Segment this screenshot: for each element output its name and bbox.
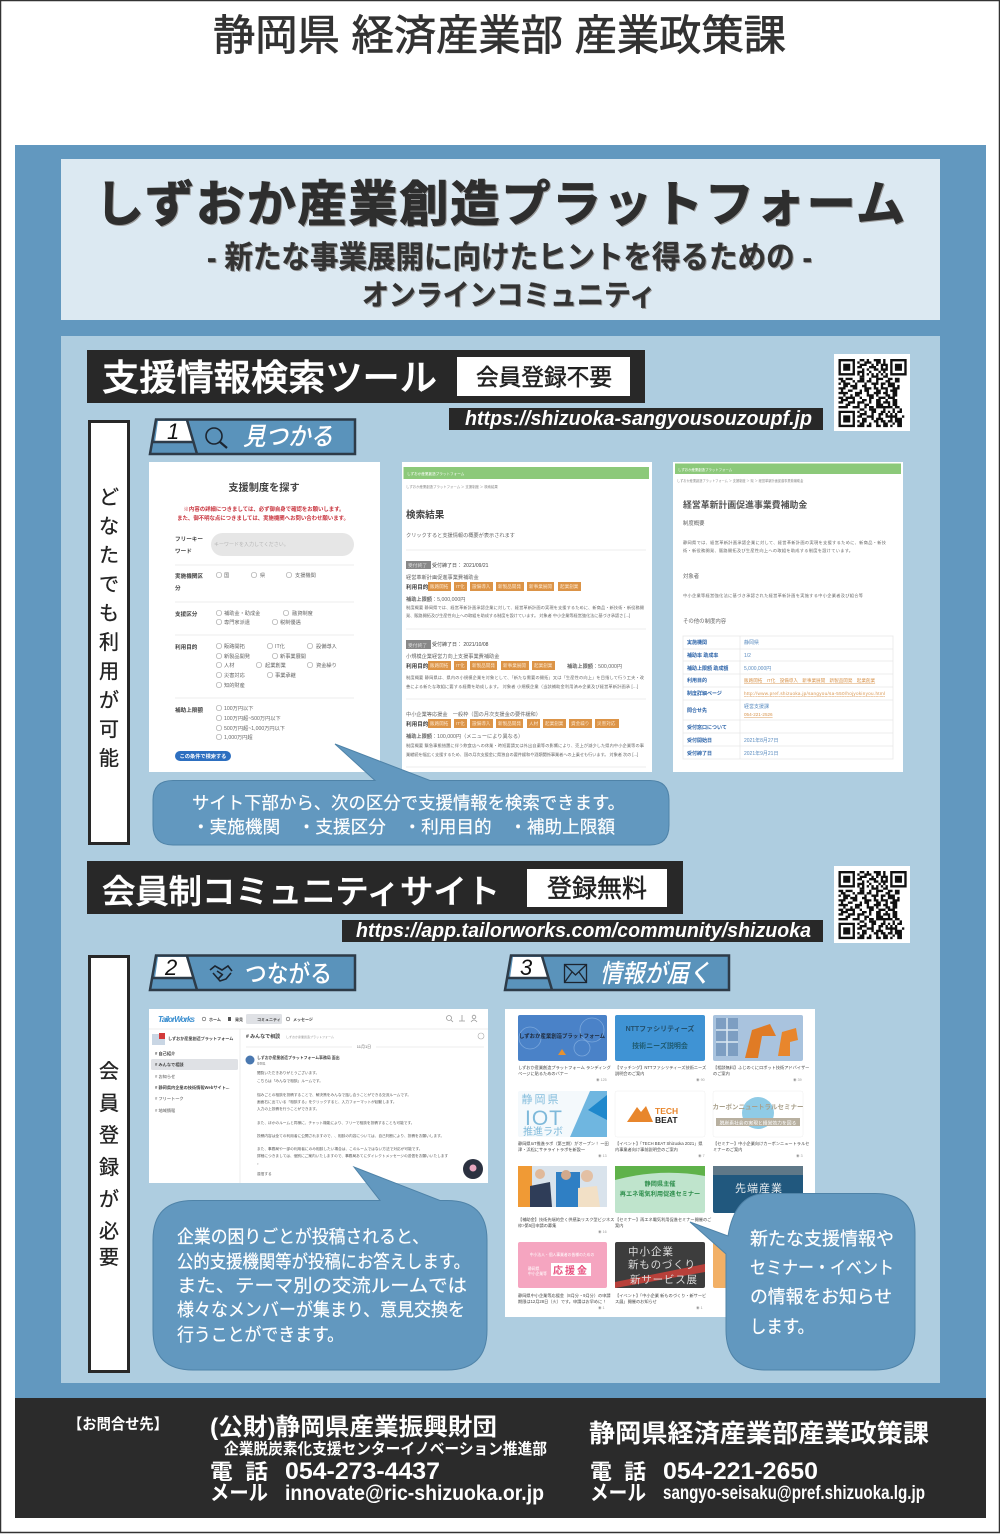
step tab 3: receive info: 3: [520, 955, 533, 980]
contact: foundation: 企業脱炭素化支援センターイノベーション推進部: [224, 1439, 547, 1458]
thumbnail: carbon neutral: [712, 1091, 804, 1137]
screenshot: search results: 受付締了日： 2021/09/21: [432, 562, 489, 569]
thumbnail: NTT: [615, 1015, 705, 1061]
screenshot: search results: しずおか産業創造プラットフォーム ＞ 支援制度 ＞ 検索結果: [406, 484, 498, 489]
screenshot: subsidy detail: http://www.pref.shizuoka.jp/sangyou/sa-550/hojyokinyou.html: [744, 691, 885, 696]
section header: community site: 会員制コミュニティサイト: [102, 873, 500, 910]
callout: community explanation: 公的支援機関等が投稿にお答えします。: [177, 1252, 470, 1272]
url: community site: https://app.tailorworks.com/community/shizuoka: [356, 920, 811, 942]
screenshot: search form: [149, 462, 380, 772]
thumbnail captions: 静岡県中小企業等応援金（8月分・9月分）の申請: [518, 1292, 611, 1299]
thumbnail: new manufacturing expo: 新ものづくり: [628, 1259, 695, 1271]
screenshot: community chat: しずおか産業創造プラットフォーム事務局 面出: [257, 1055, 340, 1060]
search button: [175, 751, 231, 761]
screenshot: search results: 中小企業等応援金 一般枠（国の月次支援金の要件緩和）: [406, 710, 541, 718]
screenshot: search results: 販路開拓: [430, 662, 449, 669]
thumbnail captions: 枠>第5回申請の募集: [518, 1222, 557, 1229]
screenshot: search results: 設備導入: [472, 720, 491, 727]
thumbnail captions: しずおか産業創造プラットフォーム ランディング: [518, 1064, 611, 1071]
thumbnail captions: 【マッチング】NTTファシリティーズ技術ニーズ: [615, 1064, 706, 1071]
screenshot: search results: 新事業展開: [503, 662, 526, 669]
screenshot: search results: 経営革新計画促進事業費補助金: [406, 573, 479, 581]
step tab 1: find: 1: [167, 419, 179, 444]
subtitle line 2: オンラインコミュニティ: [362, 280, 656, 312]
screenshot: community chat: 11月1日: [357, 1044, 371, 1049]
screenshot: subsidy detail: 経営支援課: [744, 703, 769, 710]
thumbnail: carbon neutral: カーボンニュートラルセミナー: [712, 1102, 804, 1111]
screenshot: search form: 国: [224, 572, 229, 579]
screenshot: search form: 利用目的: [175, 643, 198, 651]
screenshot: search form: 新事業展開: [280, 652, 306, 660]
screenshot: search form: キーワードを入力してください。: [214, 541, 289, 548]
thumbnail captions: 津・浜松にサテライトラボを新設～: [518, 1146, 585, 1153]
screenshot: search form: 融資制度: [292, 609, 313, 617]
screenshot: search form: 設備導入: [316, 642, 338, 650]
screenshot: search form: また、御不明な点につきましては、実施機関へお問い合わせ願います。: [177, 514, 349, 522]
screenshot: community chat: 入力の上投稿を行うことができます。: [257, 1106, 319, 1111]
subtitle line 1: - 新たな事業展開に向けたヒントを得るための -: [207, 240, 812, 275]
screenshot: search results: 人材: [529, 720, 539, 726]
screenshot: community chat: 悩みごとの相談を投稿することで、解決策をみんなで話し合うことができる交流ルームです。: [257, 1092, 411, 1097]
screenshot: subsidy detail: 054-221-2526: [744, 712, 773, 717]
vertical label: anyone can use: 用: [99, 661, 119, 683]
vertical label: membership required: [90, 956, 128, 1372]
thumbnail captions: 内事業者向け事前説明会のご案内: [615, 1146, 678, 1153]
vertical label: membership required: 必: [99, 1220, 119, 1243]
vertical label: membership required: が: [99, 1188, 119, 1211]
callout: community explanation: 行うことができます。: [177, 1325, 344, 1345]
screenshot: community chat: # みんなで相談: [246, 1033, 280, 1040]
screenshot: search form: 100万円超~500万円以下: [224, 714, 281, 722]
screenshot: search form: 知的財産: [224, 681, 245, 689]
thumbnail: platform banner: [518, 1015, 607, 1061]
screenshot: subsidy detail: しずおか産業創造プラットフォーム ＞ 支援制度 ＞ 県 ＞ 経営革新計画促進事業費補助金: [677, 478, 804, 483]
screenshot: community chat: 閲覧いただきありがとうございます。: [257, 1070, 319, 1075]
screenshot: search results: 小規模企業経営力向上支援事業費補助金: [406, 652, 500, 660]
callout: search categories: サイト下部から、次の区分で支援情報を検索できます。: [192, 793, 625, 813]
screenshot: subsidy detail: 補助率 助成率: [687, 652, 718, 659]
screenshot: search results: 起業創業: [534, 662, 553, 669]
section header: search tool: 支援情報検索ツール: [102, 357, 437, 398]
panel: light blue content area: [61, 336, 940, 1383]
screenshot: subsidy detail: しずおか産業創造プラットフォーム: [678, 467, 733, 472]
screenshot: search form: 支援機関: [295, 571, 316, 579]
thumbnail: Tech Beat: BEAT: [655, 1115, 678, 1125]
screenshot: search results: 補助上限額：100,000円（メニューにより異なる）: [406, 732, 523, 740]
vertical label: anyone can use: 能: [99, 747, 119, 770]
contact: foundation: [210, 1414, 547, 1505]
screenshot: subsidy detail: [673, 462, 903, 772]
thumbnail: workers photo: [518, 1166, 607, 1213]
thumbnail captions: ◉ 7: [698, 1153, 705, 1158]
screenshot: search form: 資金繰り: [316, 661, 337, 669]
callout: news explanation: セミナー・イベント: [750, 1258, 894, 1278]
callout: community explanation: 企業の困りごとが投稿されると、: [177, 1227, 429, 1247]
screenshot: community chat: [149, 1009, 488, 1183]
screenshot: community chat: # 静岡県内企業の技術情報Webサイト...: [155, 1084, 229, 1091]
screenshot: subsidy detail: 経営革新計画促進事業費補助金: [683, 499, 807, 510]
screenshot: search results: 受付締了日： 2021/10/08: [432, 641, 489, 648]
screenshot: subsidy detail: 静岡県: [744, 639, 759, 646]
screenshot: community chat: # みんなで相談: [155, 1061, 184, 1068]
thumbnail: new manufacturing expo: 中小企業: [628, 1245, 674, 1258]
thumbnail captions: 【イベント】「中小企業 新ものづくり・新サービ: [615, 1292, 706, 1299]
screenshot: search form: 実施機関区: [175, 572, 203, 580]
icon: handshake: [210, 966, 232, 981]
thumbnail: new manufacturing expo: 新サービス展: [630, 1274, 698, 1286]
screenshot: search results: 発、販路開拓及び生産性向上への取組を助成する制度を設けています。 対象者 中小企業等経営強化法に基づき承認さ [...]: [406, 612, 630, 619]
screenshot: search form: 事業承継: [275, 671, 296, 679]
screenshot: subsidy detail: 受付締了日: [687, 750, 712, 757]
thumbnail: Tech Beat: TECH: [655, 1106, 678, 1116]
thumbnail: robots: [713, 1015, 803, 1061]
screenshot: search form: ワード: [175, 548, 192, 555]
thumbnail: advanced industry: [713, 1166, 803, 1213]
callout: community explanation: 様々なメンバーが集まり、意見交換を: [177, 1300, 465, 1320]
screenshot: search results: 販路開拓: [430, 720, 449, 727]
screenshot: search form: 100万円以下: [224, 705, 253, 712]
thumbnail captions: ◉ 3: [796, 1153, 803, 1158]
screenshot: subsidy detail: 問合せ先: [687, 707, 707, 714]
screenshot: search form: 分: [175, 584, 181, 592]
thumbnail captions: のご案内: [713, 1070, 730, 1077]
screenshot: search results: 利用目的: [406, 583, 429, 591]
step tab 1: find: [150, 419, 355, 454]
screenshot: community chat: 。: [257, 1161, 261, 1165]
thumbnail: carbon neutral: 脱炭素社会の実現と経営効力を図る: [720, 1120, 797, 1126]
contact label: 【お問合せ先】: [68, 1416, 168, 1433]
thumbnail: advanced industry: 先端産業: [735, 1181, 783, 1195]
thumbnail captions: ◉ 16: [598, 1229, 607, 1234]
contact: prefecture: sangyo-seisaku@pref.shizuoka.lg.jp: [663, 1483, 925, 1504]
callout: news explanation: [690, 1194, 915, 1370]
callout: community explanation: また、テーマ別の交流ルームでは: [177, 1276, 467, 1296]
thumbnail: support grant: 応援金: [553, 1264, 589, 1277]
screenshot: search form: ※内容の詳細につきましては、必ず御自身で確認をお願いします。: [184, 505, 344, 513]
thumbnail: renewable energy seminar: 再エネ電気利用促進セミナー: [620, 1190, 700, 1198]
thumbnail: event partly hidden: [713, 1242, 803, 1288]
vertical label: membership required: 員: [99, 1093, 119, 1115]
thumbnail: NTT: 技術ニーズ説明会: [632, 1041, 688, 1050]
screenshot: search form: この条件で検索する: [180, 752, 226, 760]
thumbnail captions: ページに貼るためのバナー: [518, 1070, 568, 1077]
vertical label: anyone can use: が: [99, 689, 119, 712]
screenshot: search results: 新事業展開: [529, 583, 552, 590]
screenshot: search results: 善による新たな取組に要する経費を助成します。 対象者 小規模企業（当該補助金利用済み企業及び経営革新計画承 [...]: [406, 683, 638, 690]
thumbnail: Tech Beat: [615, 1091, 705, 1137]
screenshot: search results: 検索結果: [406, 509, 445, 521]
thumbnail: renewable energy seminar: 静岡県主催: [645, 1180, 675, 1188]
screenshot: subsidy detail: その他の制度内容: [683, 617, 727, 625]
section header: search tool: [87, 350, 645, 403]
screenshot: community chat: 発見: [235, 1016, 243, 1022]
screenshot: community chat: また、事務局や一部の利用者にのみ相談したい場合は、このルームではない方法で対応が可能です。: [257, 1146, 422, 1151]
screenshot: search results: 資金繰り: [571, 720, 589, 727]
thumbnail captions: 説明会のご案内: [615, 1070, 644, 1077]
screenshot: community chat: # 自己紹介: [155, 1050, 176, 1057]
screenshot: search results: 設備導入: [472, 583, 491, 590]
screenshot: subsidy detail: 受付窓口について: [687, 724, 727, 731]
screenshot: community chat: 静岡県: [257, 1062, 266, 1066]
thumbnail captions: 【補助金】技術先端的会く供感染リスク型ビジネス: [518, 1216, 614, 1223]
screenshot: subsidy detail: 1/2: [744, 653, 751, 659]
icon: QR code 2: [834, 866, 910, 943]
screenshot: search results: 補助上限額：500,000円: [567, 662, 622, 670]
screenshot: community chat: # お知らせ: [155, 1073, 175, 1080]
thumbnail: IoT lab: IOT: [525, 1107, 563, 1130]
thumbnail: support grant: 静岡県: [528, 1266, 540, 1271]
screenshot: search results: 災害対応: [597, 720, 616, 727]
screenshot: subsidy detail: 受付開始日: [687, 737, 712, 744]
step tab 2: connect: つながる: [245, 961, 332, 988]
screenshot: news grid: [505, 1009, 815, 1317]
screenshot: subsidy detail: 術・新役務開発、販路開拓及び生産性向上への取組を助成する制度を設けています。: [683, 547, 853, 554]
screenshot: community chat: 詳細につきましては、個別にご案内いたしますので、事務局あてにダイレクトメッセージの送信をお願いいたします: [257, 1153, 449, 1158]
screenshot: search form: 販路開拓: [224, 642, 245, 650]
thumbnail captions: ◉ 1: [696, 1305, 703, 1310]
screenshot: subsidy detail: 2021年8月27日: [744, 737, 778, 744]
screenshot: search results: 新製品開発: [498, 720, 521, 727]
vertical label: anyone can use: 可: [99, 719, 119, 741]
screenshot: subsidy detail: 利用目的: [687, 677, 707, 684]
vertical label: membership required: 登: [99, 1124, 119, 1147]
thumbnail: support grant: 中小法人・個人事業者の皆様のための: [530, 1252, 594, 1257]
vertical label: anyone can use: [90, 422, 128, 844]
screenshot: search form: 支援制度を探す: [228, 481, 300, 494]
callout: news explanation: します。: [750, 1317, 814, 1337]
contact: prefecture: 静岡県経済産業部産業政策課: [589, 1420, 929, 1448]
section header: search tool: 会員登録不要: [476, 364, 612, 390]
thumbnail captions: ◉ 125: [596, 1077, 607, 1082]
screenshot: search results: クリックすると支援情報の概要が表示されます: [406, 531, 515, 539]
screenshot: search form: 新製品開発: [224, 652, 251, 660]
screenshot: subsidy detail: 制度詳細ページ: [687, 690, 722, 697]
thumbnail: platform banner: しずおか産業創造プラットフォーム: [519, 1032, 606, 1040]
thumbnail captions: 【イベント】「TECH BEAT Shizuoka 2021」県: [615, 1141, 703, 1147]
callout: news explanation: の情報をお知らせ: [750, 1287, 892, 1307]
screenshot: search results: 新製品開発: [498, 583, 521, 590]
screenshot: search results: IT化: [456, 720, 465, 727]
screenshot: search results: 補助上限額：5,000,000円: [406, 595, 465, 603]
contact: foundation: 054-273-4437: [285, 1458, 440, 1485]
screenshot: search results: 起業創業: [560, 583, 579, 590]
contact: foundation: innovate@ric-shizuoka.or.jp: [285, 1482, 544, 1505]
screenshot: community chat: しずおか産業創造プラットフォーム: [168, 1035, 233, 1041]
vertical label: anyone can use: ど: [99, 486, 119, 509]
screenshot: search form: 補助上限額: [175, 706, 203, 714]
section header: community site: 登録無料: [547, 875, 647, 903]
contact: foundation: (公財)静岡県産業振興財団: [210, 1414, 497, 1441]
step tab 2: connect: 2: [164, 955, 177, 980]
thumbnail captions: 静岡県IoT推進ラボ（第三期）がオープン！ ～田: [518, 1140, 609, 1147]
vertical label: anyone can use: た: [99, 545, 119, 567]
screenshot: search results: 制度概要 静岡県では、経営革新計画承認企業に対して、経営革新計画の実現を支援するために、新商品・新技術・新役務開: [406, 604, 644, 611]
screenshot: subsidy detail: 中小企業等経営強化法に基づき承認された経営革新計画を実施する中小企業者及び組合等: [683, 592, 863, 599]
thumbnail captions: ミナーのご案内: [713, 1146, 742, 1153]
callout: search categories: ・実施機関 ・支援区分 ・利用目的 ・補助上限額: [192, 817, 616, 837]
thumbnail: IoT lab: [518, 1091, 607, 1138]
screenshot: community chat: コミュニティ: [257, 1016, 281, 1022]
vertical label: membership required: 会: [99, 1060, 119, 1083]
panel: title banner: [61, 159, 940, 320]
vertical label: anyone can use: 利: [99, 631, 119, 654]
vertical label: anyone can use: で: [99, 574, 119, 596]
screenshot: search form: 県: [260, 572, 265, 579]
screenshot: search results: 業継続を幅広く支援するため、国の月次支援金に県独自の要件緩和や酒類関係事業者への上乗せも行います。 対象者 次の [...]: [406, 751, 638, 758]
thumbnail: support grant: [518, 1242, 607, 1288]
screenshot: search results: 利用目的: [406, 662, 429, 670]
contact: foundation: 電 話: [210, 1461, 268, 1484]
screenshot: community chat: # 地域情報: [155, 1107, 176, 1114]
thumbnail captions: 期限は12月28日（火）です。申請はお早めに！: [518, 1298, 606, 1305]
screenshot: community chat: 返信する: [257, 1171, 272, 1176]
screenshot: search results: しずおか産業創造プラットフォーム: [407, 471, 465, 476]
icon: QR code 1: [834, 354, 910, 431]
thumbnail: renewable energy seminar: [615, 1166, 705, 1213]
screenshot: search results: 利用目的: [406, 720, 429, 728]
screenshot: search form: IT化: [275, 642, 286, 650]
screenshot: search results: [402, 462, 652, 772]
contact: prefecture: 054-221-2650: [663, 1458, 818, 1485]
thumbnail: IoT lab: 静岡県: [522, 1092, 560, 1106]
contact: prefecture: [589, 1420, 929, 1505]
screenshot: subsidy detail: 静岡県では、経営革新計画承認企業に対して、経営革新計画の実現を支援するために、新商品・新技: [683, 539, 887, 546]
screenshot: subsidy detail: 対象者: [683, 572, 700, 580]
screenshot: search form: 補助金・助成金: [224, 609, 261, 617]
screenshot: subsidy detail: 2021年9月21日: [744, 750, 778, 757]
contact: foundation: メール: [210, 1482, 268, 1505]
screenshot: search results: 制度概要 緊急事態措置に伴う飲食店への休業・時短要請又は外出自粛等の影響により、売上が減少した県内中小企業等の事: [406, 742, 644, 749]
screenshot: search results: 販路開拓: [430, 583, 449, 590]
thumbnail: support grant: 中小企業等: [528, 1271, 547, 1276]
thumbnail captions: 【セミナー】中小企業向けカーボンニュートラルセ: [713, 1140, 809, 1147]
screenshot: search results: 受付終了: [408, 642, 427, 649]
screenshot: subsidy detail: 実施機関: [687, 639, 707, 646]
contact: prefecture: 電 話: [590, 1461, 646, 1484]
screenshot: community chat: 画面右に出ている「相談する」をクリックすると、入力フォーマットが起動します。: [257, 1099, 397, 1104]
thumbnail captions: ◉ 13: [598, 1153, 607, 1158]
screenshot: subsidy detail: 5,000,000円: [744, 666, 771, 672]
main heading: しずおか産業創造プラットフォーム: [95, 178, 905, 232]
thumbnail: IoT lab: 推進ラボ: [523, 1125, 563, 1138]
screenshot: search results: IT化: [456, 662, 465, 669]
thumbnail: NTT: NTTファシリティーズ: [626, 1024, 694, 1033]
callout: community explanation: [153, 1167, 487, 1370]
thumbnail captions: ス展」開催のお知らせ: [615, 1298, 657, 1305]
step tab 1: find: 見つかる: [243, 423, 333, 451]
thumbnail captions: ◉ 1: [598, 1305, 605, 1310]
thumbnail captions: ◉ 90: [696, 1077, 705, 1082]
screenshot: search results: 新製品開発: [472, 662, 495, 669]
screenshot: community chat: しずおか産業創造プラットフォーム: [286, 1034, 334, 1039]
screenshot: search form: 人材: [224, 661, 234, 669]
screenshot: search results: 受付終了: [408, 562, 427, 569]
screenshot: community chat: また、ほかのルームと同様に、チャット機能により、フリーで相談を投稿することも可能です。: [257, 1120, 414, 1125]
screenshot: community chat: ホーム: [209, 1016, 221, 1022]
step tab 2: connect: [150, 955, 355, 990]
vertical label: membership required: 録: [99, 1156, 119, 1179]
callout: news explanation: 新たな支援情報や: [750, 1229, 894, 1249]
screenshot: search form: 支援区分: [175, 610, 198, 618]
icon: magnifier: [206, 428, 227, 448]
screenshot: subsidy detail: 制度概要: [683, 519, 705, 527]
panel: outer blue background: [15, 145, 986, 1399]
vertical label: membership required: 要: [99, 1247, 119, 1269]
thumbnail captions: 【相談無料】ふじのくにロボット技術アドバイザー: [713, 1064, 809, 1071]
thumbnail captions: 【セミナー】再エネ電気利用促進セミナー開催のご: [615, 1216, 712, 1223]
step tab 3: receive info: 情報が届く: [600, 960, 711, 988]
screenshot: community chat: こちらは「みんなで相談」ルームです。: [257, 1078, 323, 1083]
screenshot: search form: 500万円超~1,000万円以下: [224, 724, 285, 732]
thumbnail captions: ◉ 39: [793, 1077, 802, 1082]
section header: community site: [87, 861, 683, 914]
thumbnail captions: 案内: [615, 1222, 623, 1229]
screenshot: search results: 起業創業: [545, 720, 564, 727]
url: search tool: https://shizuoka-sangyousouzoupf.jp: [465, 408, 812, 430]
screenshot: search results: 制度概要 静岡県は、県内の小規模企業を対象として、「新たな需要の開拓」又は「生産性の向上」を目指して行う工夫・改: [406, 674, 645, 681]
top title: department name: 静岡県 経済産業部 産業政策課: [213, 12, 786, 59]
panel: contact footer: [15, 1398, 986, 1518]
thumbnail captions: [518, 1064, 809, 1310]
screenshot: search results: IT化: [456, 583, 465, 590]
screenshot: search form: 税制優遇: [280, 618, 301, 626]
screenshot: community chat: 投稿内容は全ての利用者に公開されますので、、相談の内容については、自己判断により、投稿をお願いします。: [257, 1133, 444, 1138]
vertical label: anyone can use: な: [99, 516, 119, 538]
screenshot: subsidy detail: 補助上限額 助成額: [687, 665, 728, 672]
screenshot: search form: 1,000万円超: [224, 733, 253, 741]
callout: search categories: [153, 744, 669, 845]
icon: envelope: [564, 964, 586, 982]
vertical label: anyone can use: も: [99, 603, 119, 625]
step tab 3: receive info: [505, 955, 729, 990]
screenshot: community chat: # フリートーク: [155, 1095, 184, 1102]
screenshot: search form: 起業創業: [265, 661, 286, 669]
screenshot: subsidy detail: 販路開拓 IT化 設備導入 新事業展開 新製品開発 起業創業: [744, 677, 876, 684]
thumbnail: new manufacturing expo: [615, 1242, 705, 1288]
screenshot: search form: フリーキー: [175, 536, 203, 543]
screenshot: community chat: メッセージ: [293, 1016, 313, 1022]
contact: prefecture: メール: [590, 1482, 646, 1505]
screenshot: search form: 災害対応: [224, 671, 246, 679]
screenshot: search form: 専門家派遣: [224, 618, 250, 626]
screenshot: community chat: TailorWorks: [158, 1015, 196, 1024]
